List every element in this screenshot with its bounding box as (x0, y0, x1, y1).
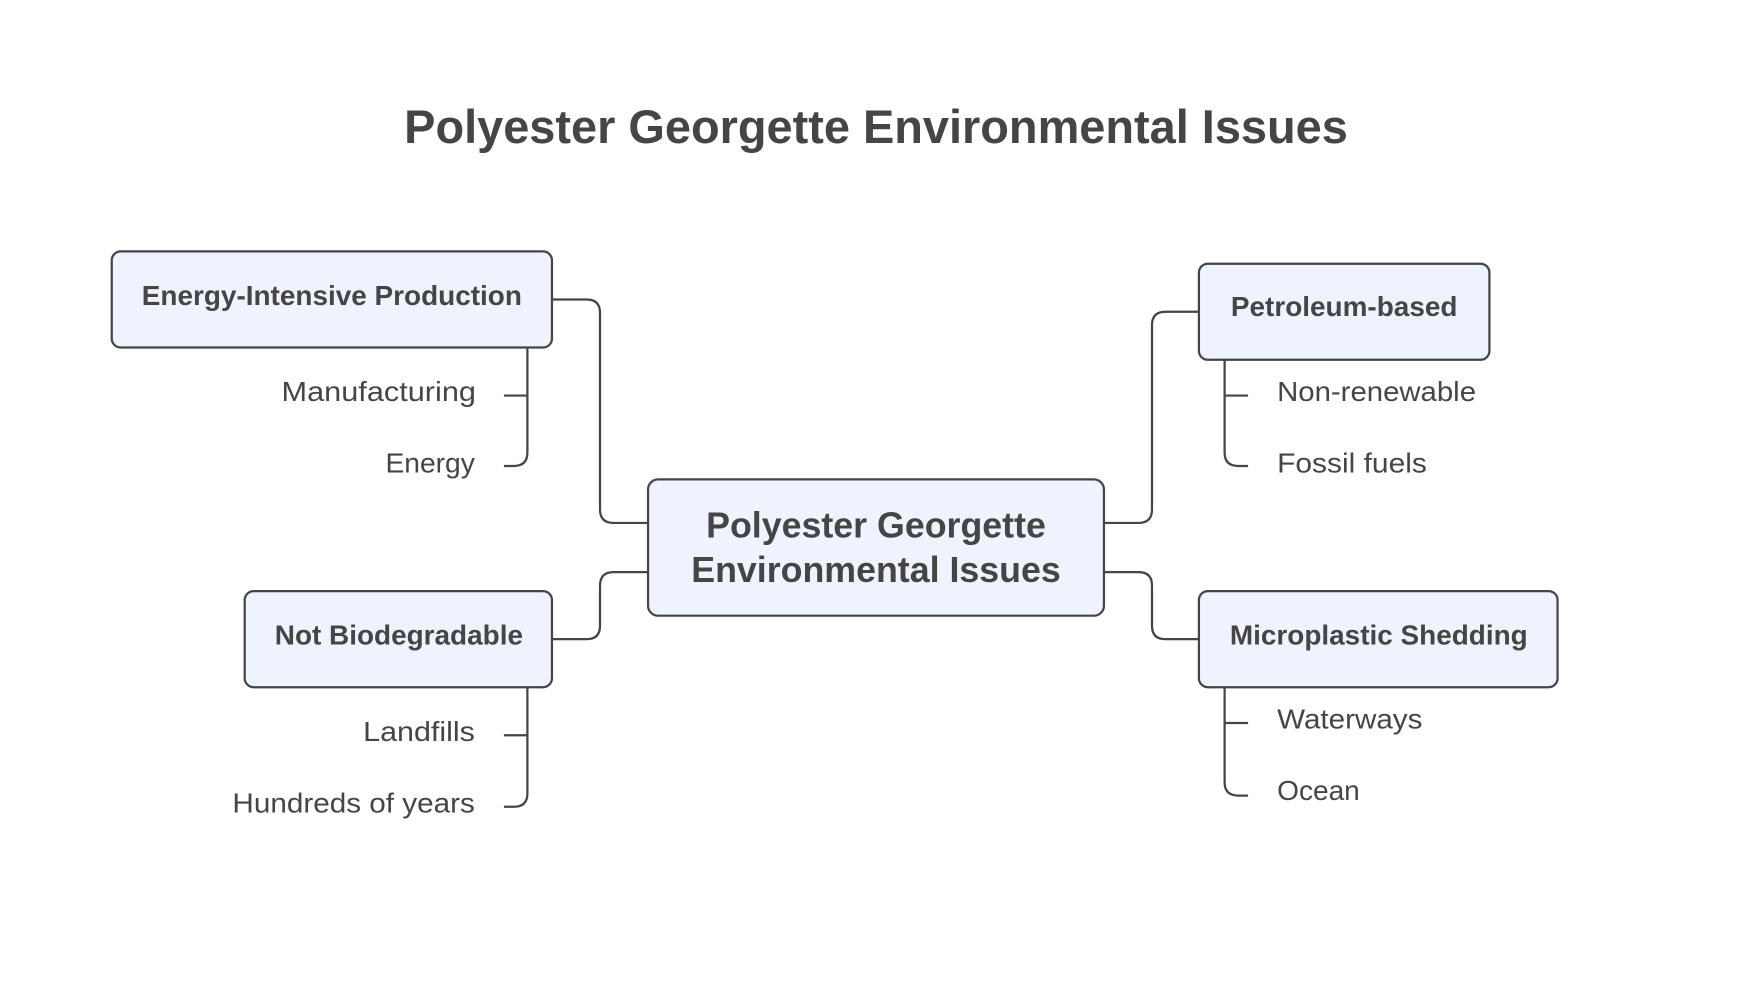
center node (648, 479, 1104, 616)
connectors: center to branches (552, 299, 1199, 639)
panel: microplastic shedding: Ocean (1277, 775, 1360, 806)
panel: petroleum-based: Fossil fuels (1277, 448, 1427, 479)
center node: Polyester Georgette (706, 505, 1046, 545)
panel: petroleum-based (1199, 264, 1489, 479)
panel: not biodegradable: Not Biodegradable (275, 620, 523, 651)
sub-branch lines (504, 348, 1248, 807)
panel: petroleum-based: Petroleum-based (1231, 291, 1457, 322)
panel: not biodegradable (232, 591, 552, 818)
panel: petroleum-based: Non-renewable (1277, 376, 1476, 407)
panel: microplastic shedding: Microplastic Shedding (1230, 620, 1528, 651)
panel: microplastic shedding: Waterways (1277, 704, 1422, 735)
panel: energy-intensive production: Manufacturing (282, 376, 476, 407)
panel: not biodegradable: Hundreds of years (232, 787, 475, 818)
center node: Environmental Issues (691, 550, 1061, 590)
panel: microplastic shedding (1199, 591, 1558, 806)
panel: energy-intensive production: Energy-Intensive Production (142, 280, 522, 311)
title: Polyester Georgette Environmental Issues (404, 101, 1348, 153)
panel: not biodegradable: Landfills (363, 716, 475, 747)
panel: energy-intensive production (112, 251, 552, 479)
panel: energy-intensive production: Energy (385, 448, 475, 479)
